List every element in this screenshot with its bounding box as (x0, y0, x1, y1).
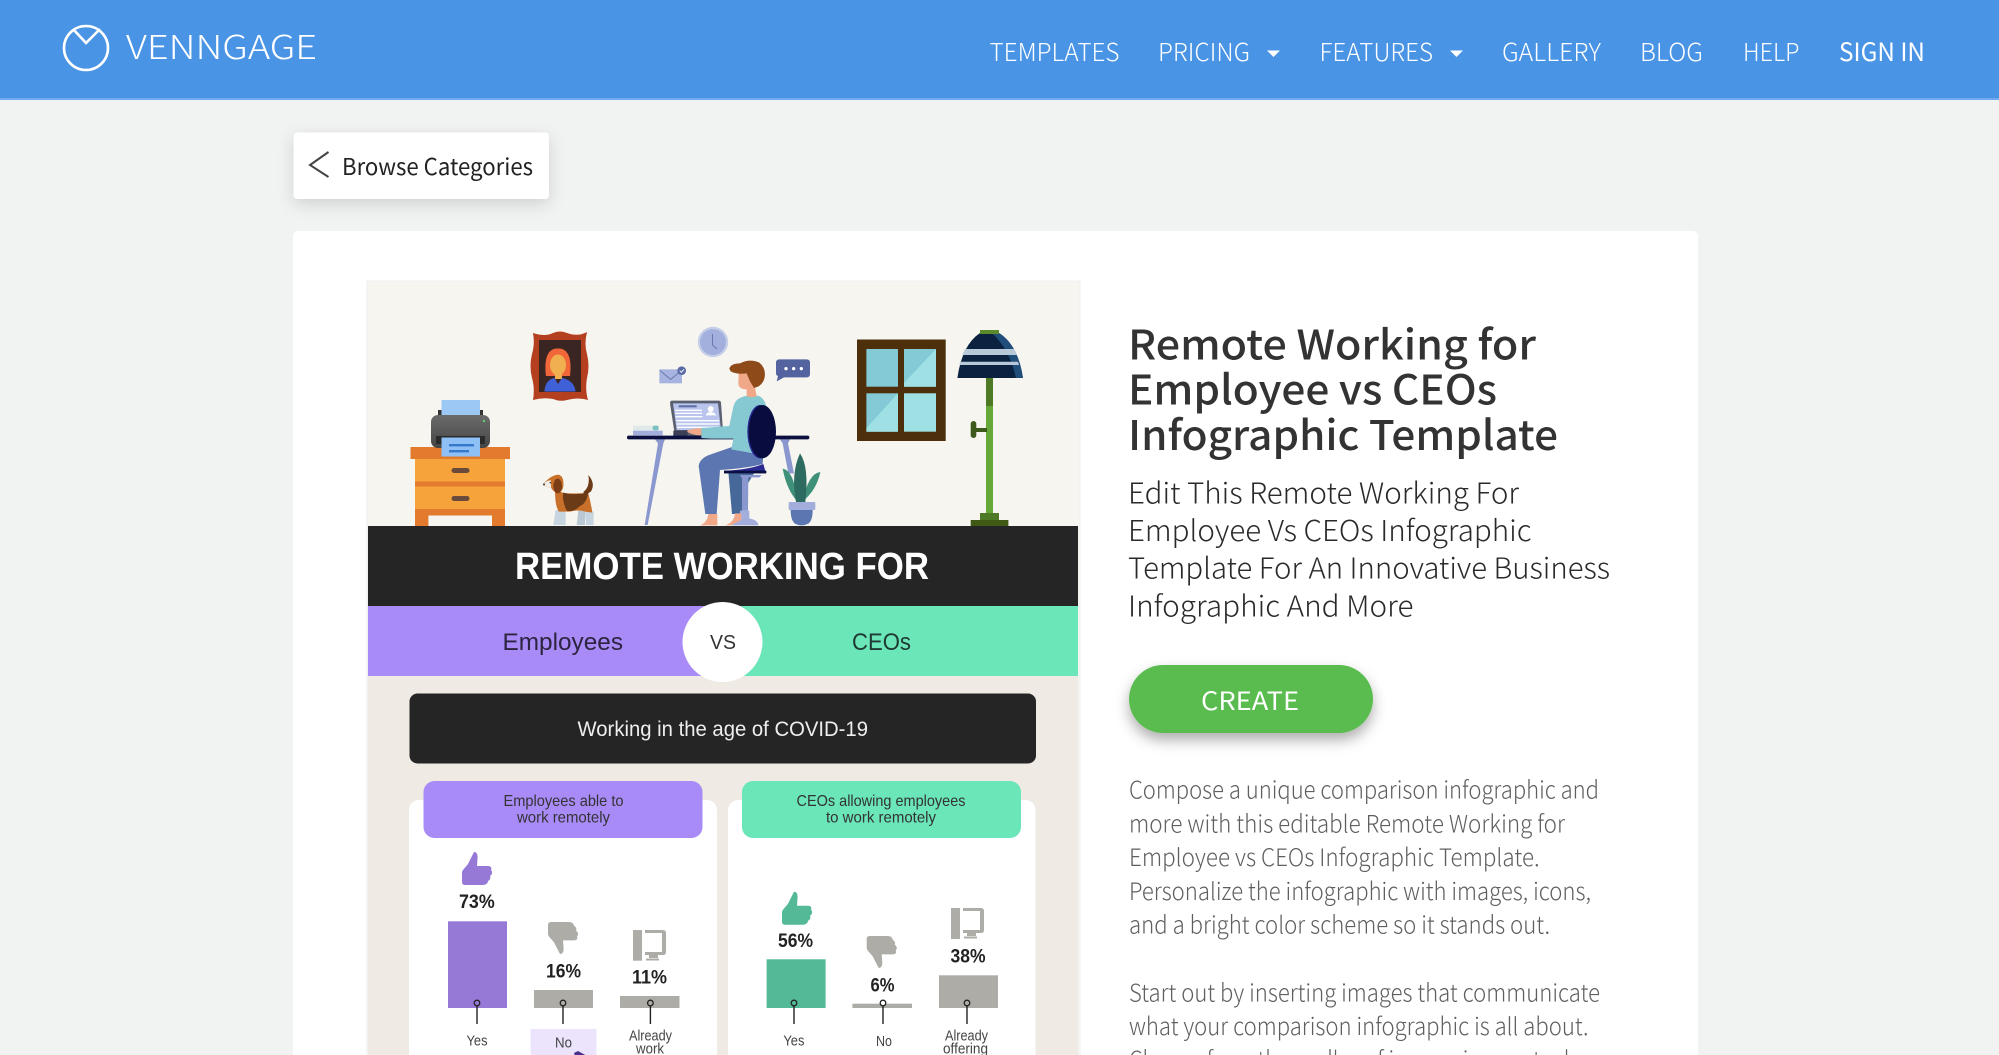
navigation header (0, 0, 1999, 100)
bar: yes 56% (767, 892, 826, 1050)
icon: venngage logo (64, 26, 108, 70)
infographic preview panel (367, 281, 1080, 1055)
description paragraph one: Compose a unique comparison infographic and (1129, 771, 1599, 806)
label: employees: Employees (502, 629, 623, 656)
illustration: floor lamp (957, 330, 1023, 526)
speech bubble icon (776, 359, 810, 381)
bar: no 16%: No (555, 1036, 572, 1052)
panel heading: employees (424, 781, 702, 838)
bar: already offering 38%: 38% (950, 947, 986, 968)
illustration: wall clock (698, 327, 728, 357)
illustration: framed portrait (530, 332, 588, 401)
bar: yes 73%: 73% (459, 892, 495, 913)
description paragraph two (1129, 973, 1600, 1055)
product subtitle: Edit This Remote Working For (1128, 470, 1520, 512)
nav: templates: TEMPLATES (990, 33, 1120, 69)
bar: already work 11%: 11% (632, 968, 667, 989)
bar: no 6% (852, 936, 912, 1050)
plant (783, 453, 820, 525)
envelope icon (659, 366, 686, 383)
label: ceos: CEOs (852, 629, 911, 656)
nav: pricing: PRICING (1158, 33, 1250, 69)
bar: no 6%: No (876, 1034, 892, 1050)
panel heading: employees: Employees able to (504, 793, 624, 810)
create button: CREATE (1201, 682, 1299, 718)
lower infographic background (368, 676, 1078, 1055)
desk legs (645, 439, 665, 525)
panel heading: ceos: CEOs allowing employees (796, 793, 966, 810)
section heading: working in the age of covid-19: Working in the age of COVID-19 (578, 717, 868, 741)
bar: already offering 38%: Already (945, 1029, 989, 1045)
torso and arm (701, 395, 766, 455)
nav: sign in: SIGN IN (1839, 33, 1925, 69)
main white card (293, 231, 1698, 1055)
illustration: dog (543, 475, 594, 525)
nav: features: FEATURES (1320, 33, 1433, 69)
chair post and base (732, 475, 762, 525)
bar: no 6%: 6% (870, 976, 895, 997)
comparison bar: employees vs ceos (368, 602, 1078, 682)
bar: yes 56%: 56% (778, 931, 813, 952)
bar: no 16%: 16% (546, 962, 581, 983)
hair (729, 361, 765, 388)
title band (368, 526, 1078, 606)
panel: ceos chart (728, 781, 1036, 1055)
nav: gallery: GALLERY (1502, 33, 1601, 69)
section heading: working in the age of covid-19 (410, 694, 1036, 764)
desk top (627, 436, 809, 439)
back leg (728, 472, 755, 514)
description paragraph two: Start out by inserting images that communicate (1129, 973, 1600, 1008)
brand name: VENNGAGE (126, 21, 317, 69)
front leg (699, 445, 763, 514)
chair seat (724, 464, 766, 473)
description paragraph one: and a bright color scheme so it stands out. (1129, 906, 1550, 941)
product title: Remote Working for (1128, 311, 1536, 371)
description paragraph two: what your comparison infographic is all about. (1129, 1007, 1588, 1042)
bar: already work 11% (620, 930, 680, 1055)
vs badge (682, 602, 762, 682)
panel: employees chart (409, 781, 717, 1055)
chair back (747, 405, 776, 458)
bar: already work 11%: Already (629, 1029, 673, 1045)
books (633, 426, 663, 435)
hand (687, 428, 701, 435)
product title: Employee vs CEOs (1128, 356, 1497, 416)
nav: blog: BLOG (1640, 33, 1703, 69)
browse categories button: Browse Categories (342, 148, 533, 182)
description paragraph one (1129, 771, 1599, 941)
icon: back chevron (310, 152, 328, 177)
create button (1129, 665, 1373, 733)
panel heading: ceos: to work remotely (826, 810, 936, 827)
product title: Infographic Template (1128, 402, 1558, 462)
panel heading: ceos (742, 781, 1021, 838)
illustration: person working at desk (627, 359, 820, 525)
product subtitle (1128, 470, 1610, 625)
bar: yes 56%: Yes (783, 1034, 804, 1050)
product subtitle: Employee Vs CEOs Infographic (1128, 508, 1532, 550)
bar: yes 73% (448, 852, 507, 1050)
neck and face (738, 373, 757, 397)
browse categories button (294, 132, 549, 199)
laptop (670, 401, 723, 436)
description paragraph one: Personalize the infographic with images, icons, (1129, 872, 1591, 907)
illustration: window (857, 340, 946, 441)
bar: yes 73%: Yes (466, 1034, 488, 1050)
description paragraph one: Employee vs CEOs Infographic Template. (1129, 838, 1540, 873)
product subtitle: Infographic And More (1128, 583, 1414, 625)
product title (1128, 311, 1558, 462)
nav: help: HELP (1743, 33, 1800, 69)
bar: no 16% (530, 922, 596, 1055)
panel heading: employees: work remotely (516, 810, 610, 827)
product subtitle: Template For An Innovative Business (1128, 546, 1610, 588)
vs badge: VS (710, 632, 736, 654)
bar: already offering 38% (939, 908, 998, 1055)
title band: REMOTE WORKING FOR (515, 546, 929, 588)
description paragraph one: more with this editable Remote Working for (1129, 804, 1565, 839)
illustration: printer on cabinet (410, 400, 510, 526)
feet (700, 514, 717, 525)
